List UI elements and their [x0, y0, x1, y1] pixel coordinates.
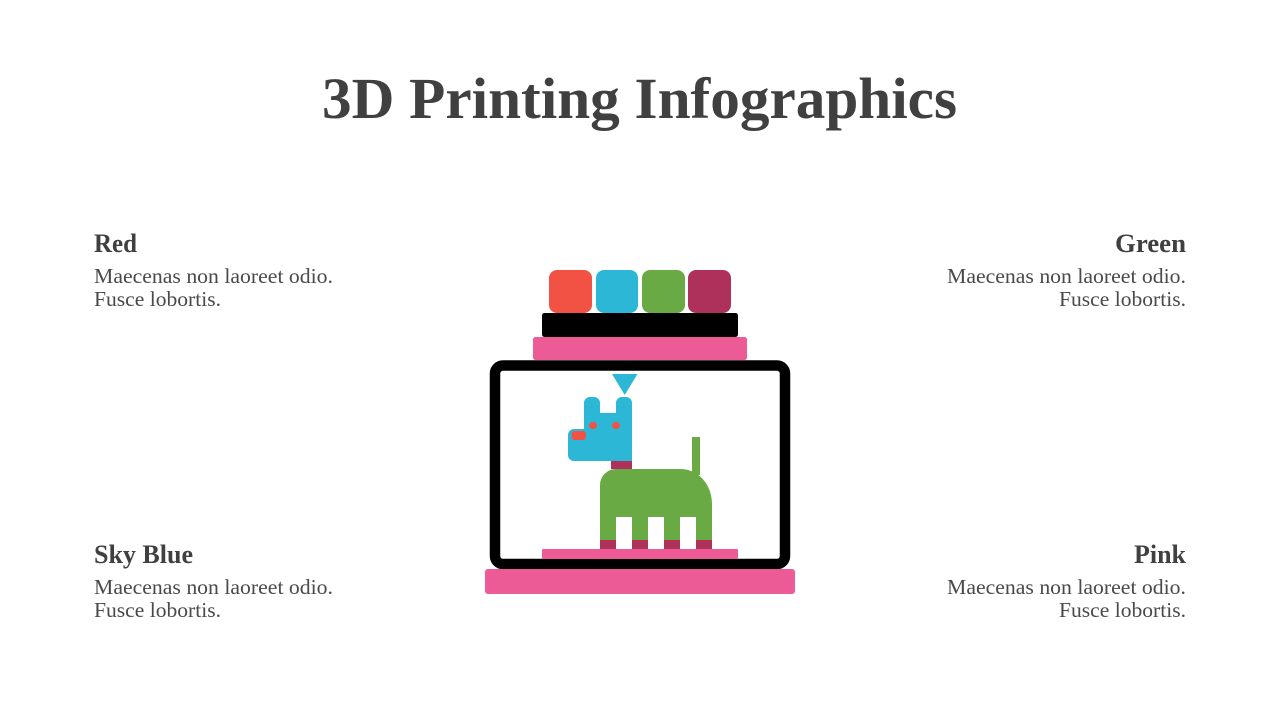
dog nose — [572, 431, 586, 440]
text block: Green: Fusce lobortis. — [1059, 287, 1186, 311]
nozzle triangle — [612, 374, 638, 395]
text block: Red — [94, 229, 333, 311]
printer frame — [495, 366, 785, 564]
printer head: black bar — [542, 313, 738, 337]
text block: Red: Maecenas non laoreet odio. — [94, 264, 333, 288]
text block: Green: Green — [1115, 229, 1187, 258]
text block: Sky Blue: Sky Blue — [94, 540, 193, 569]
filament cartridge: maroon — [688, 270, 731, 313]
dog collar — [611, 461, 632, 469]
text block: Sky Blue: Fusce lobortis. — [94, 598, 221, 622]
dog eye left — [589, 422, 597, 429]
dog head — [568, 397, 632, 461]
text block: Sky Blue — [94, 540, 333, 622]
text block: Pink: Maecenas non laoreet odio. — [947, 575, 1186, 599]
dog eye right — [612, 422, 620, 429]
text block: Pink: Pink — [1134, 540, 1187, 569]
text block: Pink: Fusce lobortis. — [1059, 598, 1186, 622]
printer base — [485, 569, 795, 594]
printed dog — [568, 397, 712, 549]
text block: Green — [947, 229, 1187, 311]
dog feet — [600, 540, 712, 549]
print bed — [542, 549, 738, 559]
filament cartridge: sky blue — [596, 270, 638, 313]
text block: Red: Fusce lobortis. — [94, 287, 221, 311]
3D printer illustration — [485, 270, 795, 594]
text block: Sky Blue: Maecenas non laoreet odio. — [94, 575, 333, 599]
filament cartridge: red — [549, 270, 592, 313]
text block: Green: Maecenas non laoreet odio. — [947, 264, 1186, 288]
filament cartridge: green — [642, 270, 685, 313]
dog body and legs — [600, 469, 712, 540]
text block: Red: Red — [94, 229, 138, 258]
text block: Pink — [947, 540, 1187, 622]
printer head: pink bar — [533, 337, 747, 360]
dog tail — [692, 437, 700, 475]
title: 3D Printing Infographics — [322, 66, 957, 131]
